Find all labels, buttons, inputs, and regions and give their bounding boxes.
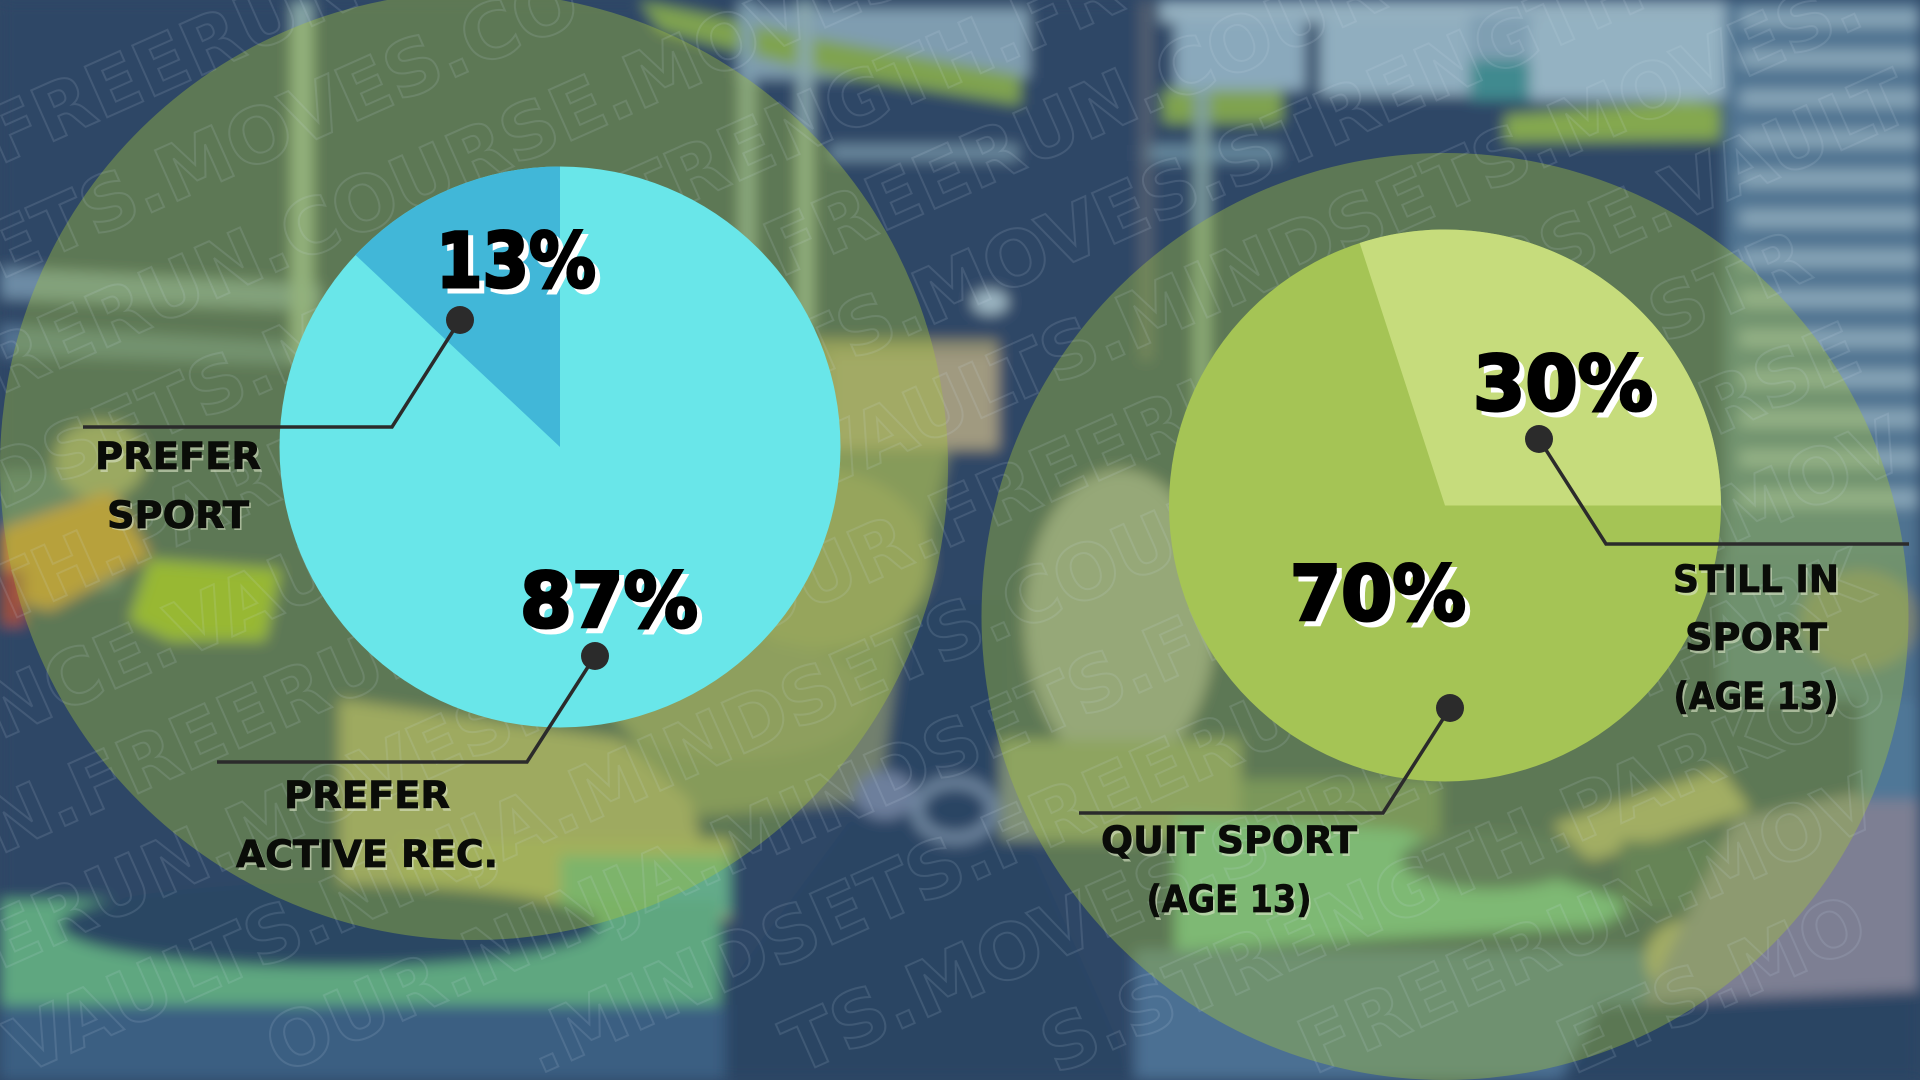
pie slice: quit sport 70% bbox=[1169, 230, 1721, 782]
pie slice: prefer active rec 87% bbox=[280, 166, 840, 728]
value: 70%: 70% bbox=[1295, 554, 1471, 643]
watermark text pattern: OUR.NINJA.MINDSETS.FREERUN.COURSE bbox=[252, 304, 1873, 1080]
pie chart: still in sport vs quit sport bbox=[1169, 229, 1721, 781]
callout line: quit sport bbox=[1079, 694, 1464, 813]
watermark text pattern: .MINDSETS.FREERUN.COURSE.MOV bbox=[510, 399, 1918, 1080]
label: quit sport age 13 bbox=[1101, 819, 1360, 924]
label: prefer sport bbox=[95, 435, 263, 539]
label: quit sport age 13: (AGE 13) bbox=[1148, 881, 1314, 924]
left outer circle bbox=[0, 0, 948, 940]
label: still in sport age 13: SPORT bbox=[1685, 616, 1828, 659]
watermark text pattern: TS.MOVES.STRENGTH.PARK bbox=[769, 529, 1885, 1080]
watermark text pattern: S.STRENGTH.PARKOU bbox=[1027, 637, 1901, 1080]
label: still in sport age 13: (AGE 13) bbox=[1676, 678, 1840, 721]
pie slice: prefer sport 13% bbox=[356, 166, 560, 447]
watermark text pattern: ERUN.MOVES.PARKOUR.FREERUN.COURSE.VAULT bbox=[0, 52, 1920, 986]
label: prefer active rec: PREFER bbox=[284, 774, 450, 817]
label: still in sport age 13 bbox=[1673, 558, 1841, 721]
label: prefer active rec: PREFER bbox=[286, 777, 452, 820]
label: quit sport age 13: (AGE 13) bbox=[1146, 878, 1312, 921]
label: prefer active rec: ACTIVE REC. bbox=[236, 833, 498, 876]
label: still in sport age 13: SPORT bbox=[1687, 619, 1830, 662]
value: 87%: 87% bbox=[525, 561, 703, 650]
label: prefer sport: PREFER bbox=[95, 435, 261, 478]
label: still in sport age 13: STILL IN bbox=[1675, 561, 1841, 604]
value: 30%: 30% bbox=[1478, 344, 1658, 433]
label: prefer sport: PREFER bbox=[97, 438, 263, 481]
callout line: still in sport bbox=[1525, 425, 1909, 544]
value: 13%: 13% bbox=[436, 216, 596, 305]
label: prefer active rec: ACTIVE REC. bbox=[238, 836, 500, 879]
value: 87%: 87% bbox=[520, 556, 698, 645]
label: still in sport age 13: STILL IN bbox=[1673, 558, 1839, 601]
callout line: prefer active rec bbox=[217, 642, 609, 762]
right outer circle bbox=[982, 153, 1908, 1080]
pie chart: sport vs active recreation bbox=[280, 166, 840, 728]
value: 30%: 30% bbox=[1473, 339, 1653, 428]
label: quit sport age 13: QUIT SPORT bbox=[1101, 819, 1358, 862]
label: still in sport age 13: (AGE 13) bbox=[1674, 675, 1838, 718]
label: prefer active rec bbox=[236, 774, 500, 879]
label: prefer sport: SPORT bbox=[109, 496, 252, 539]
value: 13%: 13% bbox=[441, 221, 601, 310]
pie slice: still in sport 30% bbox=[1360, 229, 1721, 506]
callout line: prefer sport bbox=[83, 306, 474, 427]
label: prefer sport: SPORT bbox=[107, 494, 250, 537]
watermark text pattern: VAULTS.NINJA.MINDSETS.COURSE.MOVES.STR bbox=[0, 212, 1822, 1080]
label: quit sport age 13: QUIT SPORT bbox=[1103, 822, 1360, 865]
value: 70%: 70% bbox=[1290, 549, 1466, 638]
